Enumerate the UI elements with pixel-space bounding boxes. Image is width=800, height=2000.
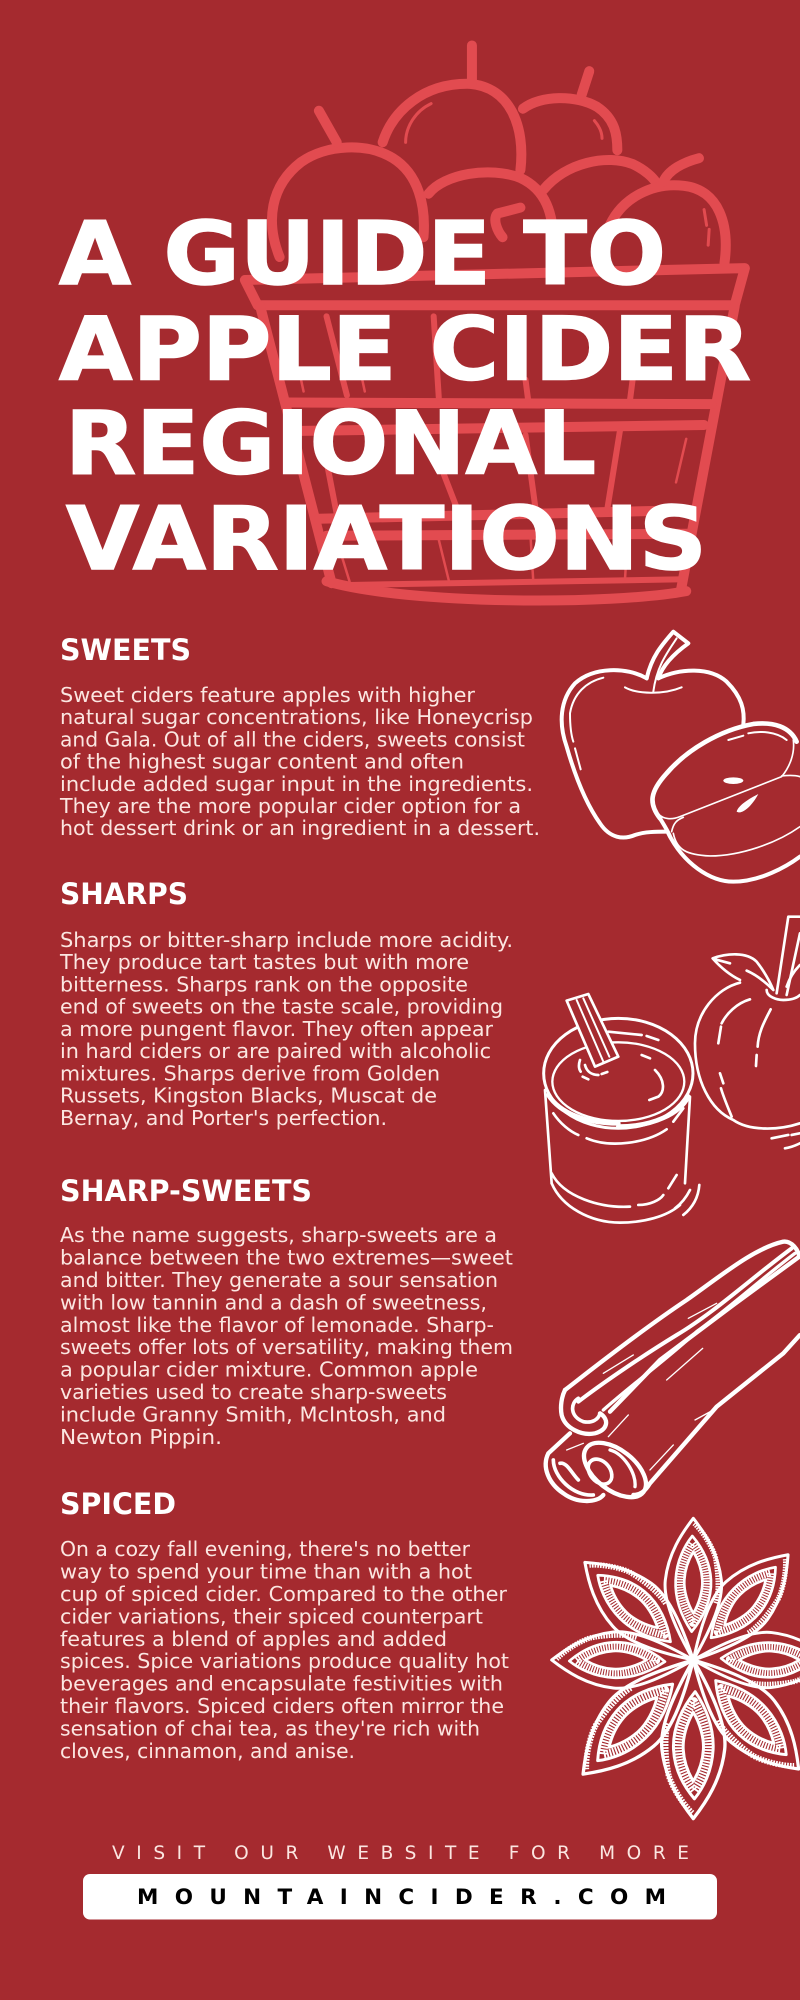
title: A GUIDE TO	[59, 203, 666, 305]
text block: spiced: On a cozy fall evening, there's no better	[60, 1537, 471, 1561]
text block: spiced: their flavors. Spiced ciders often mirror the	[60, 1694, 504, 1718]
text block: spiced: cider variations, their spiced counterpart	[60, 1604, 483, 1628]
text block: sharp-sweets: sweets offer lots of versatility, making them	[60, 1335, 513, 1359]
text block: sweets	[59, 683, 540, 840]
title: VARIATIONS	[66, 488, 707, 590]
panel: sweets	[59, 632, 800, 882]
text block: sharps	[59, 928, 513, 1130]
heading: sharps: SHARPS	[60, 877, 188, 911]
icon: apple and apple half	[562, 632, 800, 882]
text block: sweets: of the highest sugar content and often	[60, 750, 464, 774]
footer website button	[83, 1874, 717, 1920]
text block: sharp-sweets: As the name suggests, sharp-sweets are a	[60, 1223, 497, 1247]
icon: apple basket background illustration	[245, 45, 745, 601]
icon: cinnamon sticks	[546, 1242, 800, 1508]
panel: sharps	[59, 877, 800, 1223]
icon: cider cup and apple	[544, 917, 800, 1223]
text block: sharp-sweets: with low tannin and a dash of sweetness,	[60, 1290, 487, 1314]
panel: sharp-sweets	[60, 1174, 800, 1508]
text block: sharps: mixtures. Sharps derive from Golden	[60, 1062, 440, 1086]
text block: spiced: way to spend your time than with a hot	[60, 1559, 472, 1583]
title: REGIONAL	[65, 392, 596, 494]
text block: sweets: hot dessert drink or an ingredient in a dessert.	[60, 816, 540, 840]
footer call to action text: VISIT OUR WEBSITE FOR MORE	[112, 1843, 689, 1864]
text block: sharps: end of sweets on the taste scale, providing	[60, 995, 503, 1019]
text block: sweets: natural sugar concentrations, like Honeycrisp	[60, 705, 533, 729]
heading: sweets: SWEETS	[60, 633, 191, 667]
text block: spiced: beverages and encapsulate festivities with	[60, 1672, 503, 1696]
text block: sweets: Sweet ciders feature apples with higher	[60, 683, 476, 707]
text block: sharps: bitterness. Sharps rank on the opposite	[60, 972, 468, 996]
text block: sharp-sweets: almost like the flavor of lemonade. Sharp-	[60, 1313, 494, 1337]
text block: sharps: Russets, Kingston Blacks, Muscat de	[60, 1084, 437, 1108]
text block: sharps: in hard ciders or are paired with alcoholic	[60, 1039, 491, 1063]
text block: sharps: Sharps or bitter-sharp include more acidity.	[60, 928, 513, 952]
panel: spiced	[60, 1487, 800, 1819]
text block: spiced	[60, 1537, 509, 1763]
text block: sweets: include added sugar input in the ingredients.	[60, 772, 533, 796]
text block: sharps: Bernay, and Porter's perfection.	[60, 1106, 387, 1130]
text block: sharp-sweets: balance between the two extremes—sweet	[60, 1245, 513, 1269]
heading: sharp-sweets: SHARP-SWEETS	[60, 1174, 312, 1208]
text block: sharps: a more pungent flavor. They often appear	[60, 1017, 494, 1041]
text block: sharp-sweets: Newton Pippin.	[60, 1425, 222, 1449]
text block: sharp-sweets: varieties used to create sharp-sweets	[60, 1380, 447, 1404]
footer website button: MOUNTAINCIDER.COM	[137, 1885, 666, 1910]
text block: spiced: features a blend of apples and added	[60, 1627, 447, 1651]
text block: sweets: They are the more popular cider option for a	[59, 794, 521, 818]
text block: spiced: spices. Spice variations produce quality hot	[60, 1649, 509, 1673]
text block: sharp-sweets	[60, 1223, 513, 1449]
text block: sharps: They produce tart tastes but with more	[59, 950, 469, 974]
text block: spiced: sensation of chai tea, as they're rich with	[60, 1717, 480, 1741]
text block: spiced: cup of spiced cider. Compared to the other	[60, 1582, 508, 1606]
title	[59, 203, 751, 590]
text block: sweets: and Gala. Out of all the ciders, sweets consist	[60, 727, 525, 751]
title: APPLE CIDER	[59, 298, 751, 400]
text block: spiced: cloves, cinnamon, and anise.	[60, 1739, 355, 1763]
icon: star anise	[552, 1518, 800, 1819]
text block: sharp-sweets: and bitter. They generate a sour sensation	[60, 1268, 498, 1292]
text block: sharp-sweets: include Granny Smith, McIntosh, and	[60, 1403, 446, 1427]
text block: sharp-sweets: a popular cider mixture. Common apple	[60, 1358, 478, 1382]
heading: spiced: SPICED	[60, 1487, 176, 1521]
